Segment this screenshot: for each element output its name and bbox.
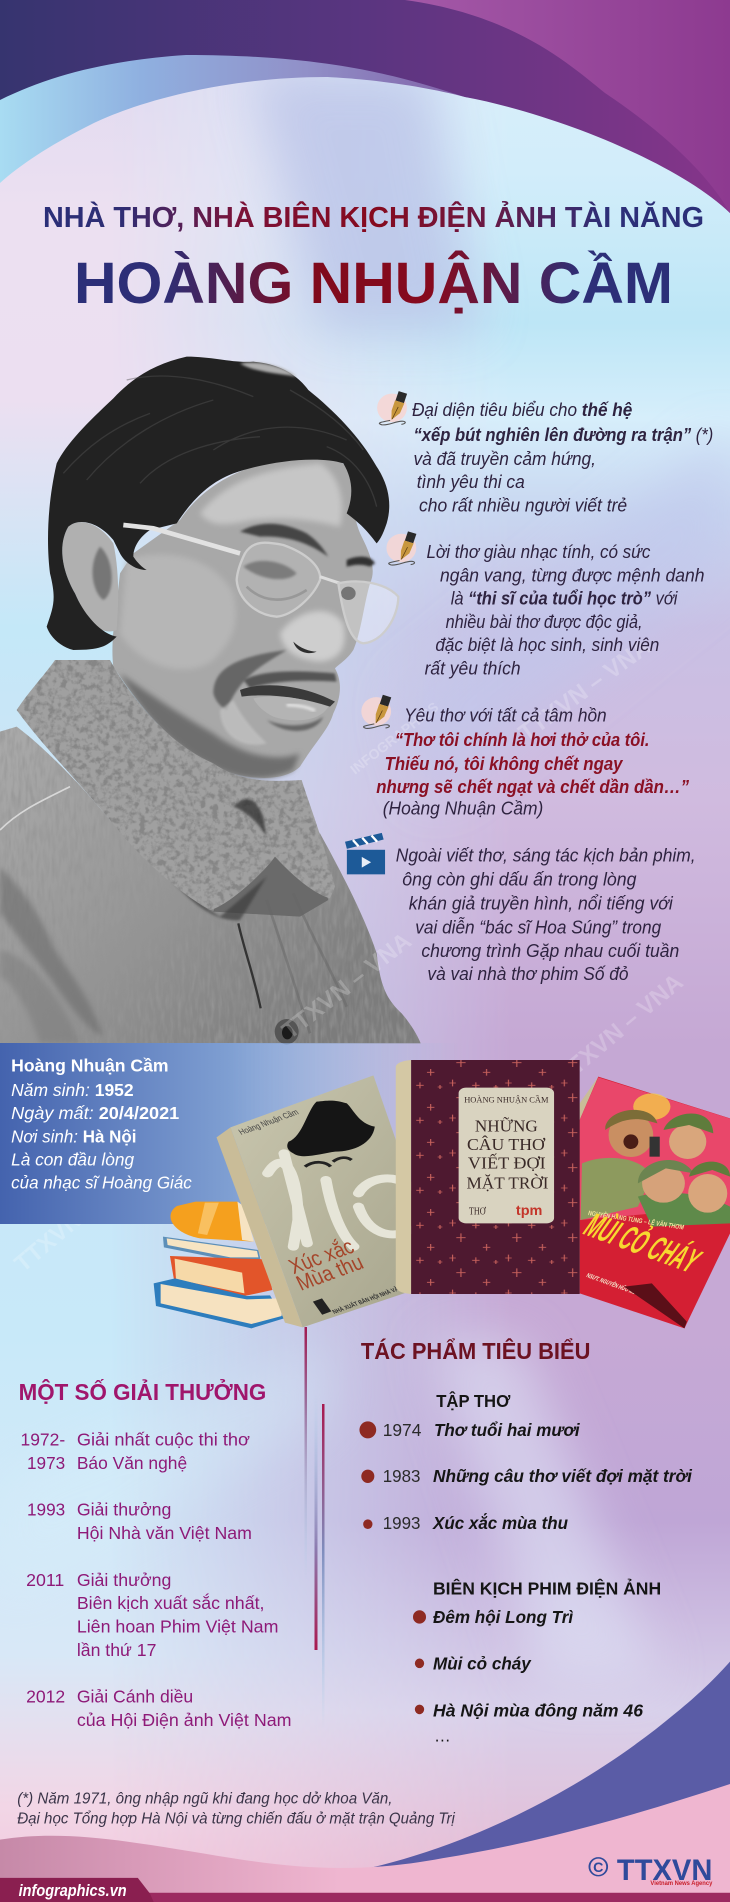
text block: musical poetry: đặc biệt là học sinh, sinh viên xyxy=(435,635,659,656)
book: Những câu thơ viết đợi mặt trời: tpm xyxy=(516,1203,542,1218)
eyes and brows xyxy=(240,524,375,600)
info banner xyxy=(0,1043,460,1224)
footer bar xyxy=(0,1878,730,1902)
info banner: Năm sinh: 1952 xyxy=(11,1080,134,1100)
info banner: Là con đầu lòng xyxy=(11,1149,134,1170)
panel: representative works xyxy=(359,1338,692,1746)
watermarks: TTXVN – VNA xyxy=(10,1157,146,1278)
award: 2011: lần thứ 17 xyxy=(77,1641,156,1660)
text block: generation: cho rất nhiều người viết trẻ xyxy=(419,496,627,516)
text block: film: khán giả truyền hình, nổi tiếng với xyxy=(409,894,673,915)
text block: film xyxy=(345,833,696,985)
vertical divider lines xyxy=(304,1327,324,1728)
award: 2012 xyxy=(26,1688,291,1731)
icon: pen xyxy=(377,391,408,425)
award: 2011 xyxy=(26,1571,278,1660)
text block: quote: nhưng sẽ chết ngạt và chết dần dần…” xyxy=(376,777,689,798)
film list xyxy=(413,1608,644,1746)
award: 2011: 2011 xyxy=(26,1571,64,1590)
icon: pen xyxy=(361,695,392,728)
hair xyxy=(47,357,389,650)
book: Những câu thơ viết đợi mặt trời xyxy=(396,1060,580,1294)
icon: book stack xyxy=(154,1202,284,1328)
text block: musical poetry: ngân vang, từng được mệnh danh xyxy=(440,566,704,586)
info banner: Hoàng Nhuận Cầm xyxy=(11,1055,169,1076)
poetry list: 1993 xyxy=(383,1514,420,1533)
poetry list: Thơ tuổi hai mươi xyxy=(434,1421,580,1440)
watermarks: TTXVN – VNA xyxy=(514,633,656,747)
glasses xyxy=(123,525,398,643)
face xyxy=(47,357,398,778)
biography text column xyxy=(345,391,713,985)
text block: quote: Thiếu nó, tôi không chết ngay xyxy=(385,754,624,775)
award: 1972-1973: 1973 xyxy=(27,1454,65,1473)
ear xyxy=(62,522,118,631)
text block: generation: tình yêu thi ca xyxy=(417,473,525,493)
title xyxy=(43,201,704,316)
text block: musical poetry: rất yêu thích xyxy=(425,659,521,679)
footnote: Đại học Tổng hợp Hà Nội và từng chiến đấu ở mặt trận Quảng Trị xyxy=(17,1810,456,1827)
title: NHÀ THƠ, NHÀ BIÊN KỊCH ĐIỆN ẢNH TÀI NĂNG xyxy=(43,201,704,234)
logo: TTXVN xyxy=(589,1854,713,1887)
top purple wave header xyxy=(0,0,730,213)
text block: musical poetry: là “thi sĩ của tuổi học trò” với xyxy=(451,589,678,610)
watermarks: INFOGRAPHICS xyxy=(347,699,441,777)
book: Xúc xắc mùa thu: Mùa thu xyxy=(290,1251,369,1295)
award: 2012: Giải Cánh diều xyxy=(77,1688,193,1707)
award: 2012: 2012 xyxy=(26,1688,65,1707)
text block: musical poetry: Lời thơ giàu nhạc tính, có sức xyxy=(426,542,651,563)
film list: Đêm hội Long Trì xyxy=(433,1608,573,1627)
award: 1972-1973: 1972- xyxy=(20,1430,65,1450)
bottom swooshes xyxy=(0,1662,730,1902)
heading: awards: MỘT SỐ GIẢI THƯỞNG xyxy=(19,1379,266,1405)
panel: awards xyxy=(19,1379,291,1731)
award: 1972-1973: Báo Văn nghệ xyxy=(77,1454,187,1473)
book: Mùi cỏ cháy: NSƯT. NGUYỄN HỮU MƯỜI xyxy=(585,1272,643,1298)
info banner: của nhạc sĩ Hoàng Giác xyxy=(11,1172,192,1192)
subheading: screenwriting: BIÊN KỊCH PHIM ĐIỆN ẢNH xyxy=(433,1578,661,1599)
logo: TTXVN: C xyxy=(593,1861,603,1876)
book: Xúc xắc mùa thu xyxy=(217,1075,412,1327)
text block: quote xyxy=(361,695,689,819)
book: Những câu thơ viết đợi mặt trời: NHỮNG xyxy=(475,1116,538,1136)
book: Xúc xắc mùa thu: NHÀ XUẤT BẢN HỘI NHÀ VĂN xyxy=(330,1283,404,1315)
award: 2012: của Hội Điện ảnh Việt Nam xyxy=(77,1711,291,1731)
footnote xyxy=(17,1790,456,1827)
text block: quote: “Thơ tôi chính là hơi thở của tôi. xyxy=(395,730,650,751)
text block: film: Ngoài viết thơ, sáng tác kịch bản phim, xyxy=(396,846,696,866)
icon: pen xyxy=(386,531,417,565)
book: Những câu thơ viết đợi mặt trời: CÂU THƠ xyxy=(467,1135,546,1154)
text block: generation: và đã truyền cảm hứng, xyxy=(413,449,596,470)
text block: film: vai diễn “bác sĩ Hoa Súng” trong xyxy=(415,918,661,938)
book: Mùi cỏ cháy xyxy=(576,1077,730,1328)
text block: film: chương trình Gặp nhau cuối tuần xyxy=(421,941,679,962)
title: HOÀNG NHUẬN CẦM xyxy=(74,251,673,316)
text block: quote: Yêu thơ với tất cả tâm hồn xyxy=(404,706,607,727)
watermarks xyxy=(10,633,688,1278)
watermarks: TTXVN – VNA xyxy=(277,927,417,1045)
book: Xúc xắc mùa thu: Xúc xắc xyxy=(282,1234,360,1279)
award: 2011: Liên hoan Phim Việt Nam xyxy=(77,1618,278,1637)
book: Những câu thơ viết đợi mặt trời: VIẾT ĐỢI xyxy=(468,1153,546,1172)
info banner: Ngày mất: 20/4/2021 xyxy=(11,1103,179,1123)
logo: TTXVN: Vietnam News Agency xyxy=(650,1881,713,1887)
sheepskin collar xyxy=(17,660,335,910)
poetry list: 1983 xyxy=(383,1467,420,1487)
books illustration xyxy=(154,1060,730,1328)
info banner: Nơi sinh: Hà Nội xyxy=(11,1126,136,1146)
text block: generation xyxy=(377,391,713,516)
award: 1993 xyxy=(27,1501,252,1543)
award: 2011: Giải thưởng xyxy=(77,1571,171,1590)
mouth xyxy=(240,671,337,731)
award: 1993: Giải thưởng xyxy=(77,1501,171,1520)
jacket xyxy=(0,727,421,1044)
award: 1972-1973 xyxy=(20,1430,250,1473)
text block: film: và vai nhà thơ phim Số đỏ xyxy=(427,964,629,985)
award: 1993: 1993 xyxy=(27,1501,65,1520)
footnote: (*) Năm 1971, ông nhập ngũ khi đang học dở khoa Văn, xyxy=(17,1790,393,1807)
text block: film: ông còn ghi dấu ấn trong lòng xyxy=(402,870,637,890)
poetry list xyxy=(359,1421,692,1533)
film list: … xyxy=(434,1726,451,1746)
text block: quote: (Hoàng Nhuận Cầm) xyxy=(383,799,543,819)
award: 1972-1973: Giải nhất cuộc thi thơ xyxy=(77,1430,250,1450)
book: Những câu thơ viết đợi mặt trời: THƠ xyxy=(469,1205,486,1217)
book: Xúc xắc mùa thu: Hoàng Nhuận Cầm xyxy=(237,1108,301,1137)
book: Những câu thơ viết đợi mặt trời: MẶT TRỜI xyxy=(467,1173,549,1192)
poetry list: 1974 xyxy=(383,1421,421,1440)
watermarks: TTXVN – VNA xyxy=(552,969,688,1090)
film list: Mùi cỏ cháy xyxy=(433,1655,532,1674)
poetry list: Xúc xắc mùa thu xyxy=(432,1513,568,1533)
award: 1993: Hội Nhà văn Việt Nam xyxy=(77,1524,252,1543)
text block: musical poetry: nhiều bài thơ được độc giả, xyxy=(446,612,643,633)
subheading: poetry: TẬP THƠ xyxy=(436,1390,511,1411)
source: infographics.vn: infographics.vn xyxy=(19,1881,127,1900)
book: Những câu thơ viết đợi mặt trời: HOÀNG NHUẬN CẦM xyxy=(464,1094,549,1105)
text block: generation: Đại diện tiêu biểu cho thế hệ xyxy=(412,400,633,421)
text block: musical poetry xyxy=(386,531,704,679)
heading: works: TÁC PHẨM TIÊU BIỂU xyxy=(361,1338,590,1364)
award: 2011: Biên kịch xuất sắc nhất, xyxy=(77,1593,264,1614)
icon: clapperboard xyxy=(345,833,385,874)
portrait photo xyxy=(0,357,421,1044)
film list: Hà Nội mùa đông năm 46 xyxy=(433,1701,644,1721)
